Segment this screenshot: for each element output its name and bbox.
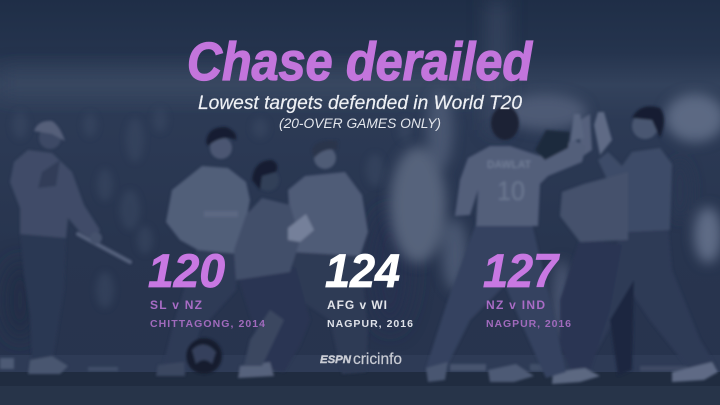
jersey lettering xyxy=(487,159,531,206)
stat: 124: 124 xyxy=(325,244,400,297)
player: wicketkeeper crouching with gloves xyxy=(186,160,314,378)
stat: 120 xyxy=(148,244,265,330)
jersey lettering: 10 xyxy=(497,176,525,206)
player: left teammate with headband xyxy=(156,127,250,376)
subtitle: Lowest targets defended in World T20 xyxy=(198,93,522,114)
stat: 127: 127 xyxy=(483,244,560,297)
stat: 127 xyxy=(483,244,571,330)
stat: 120: 120 xyxy=(148,244,225,297)
logo: ESPN cricinfo: cricinfo xyxy=(353,351,402,368)
logo: ESPN cricinfo: ESPN xyxy=(320,354,352,366)
note: (20-OVER GAMES ONLY) xyxy=(279,116,441,131)
stat: 120: CHITTAGONG, 2014 xyxy=(150,318,265,330)
stat: 127: NAGPUR, 2016 xyxy=(486,318,571,330)
players: celebrating Afghanistan team, left group xyxy=(10,121,368,378)
players: right group celebrating xyxy=(426,106,718,384)
logo: ESPN cricinfo xyxy=(320,351,402,368)
stat: 127: NZ v IND xyxy=(486,298,545,312)
player: batter walking off with bat xyxy=(10,121,130,374)
stat: 124: NAGPUR, 2016 xyxy=(327,318,413,330)
player: right teammate with cap xyxy=(288,140,368,374)
jersey lettering: DAWLAT xyxy=(487,159,531,171)
title: Chase derailed xyxy=(187,32,533,92)
stat: 124 xyxy=(325,244,413,330)
stat: 120: SL v NZ xyxy=(150,298,202,312)
player: middle teammate xyxy=(552,114,628,384)
stat: 124: AFG v WI xyxy=(327,298,387,312)
player: Dawlat, number 10 xyxy=(426,106,586,382)
player: high-fiving teammate xyxy=(570,106,718,382)
helmet on the ground xyxy=(186,338,222,374)
ground: outfield and pitch strip xyxy=(0,355,720,405)
